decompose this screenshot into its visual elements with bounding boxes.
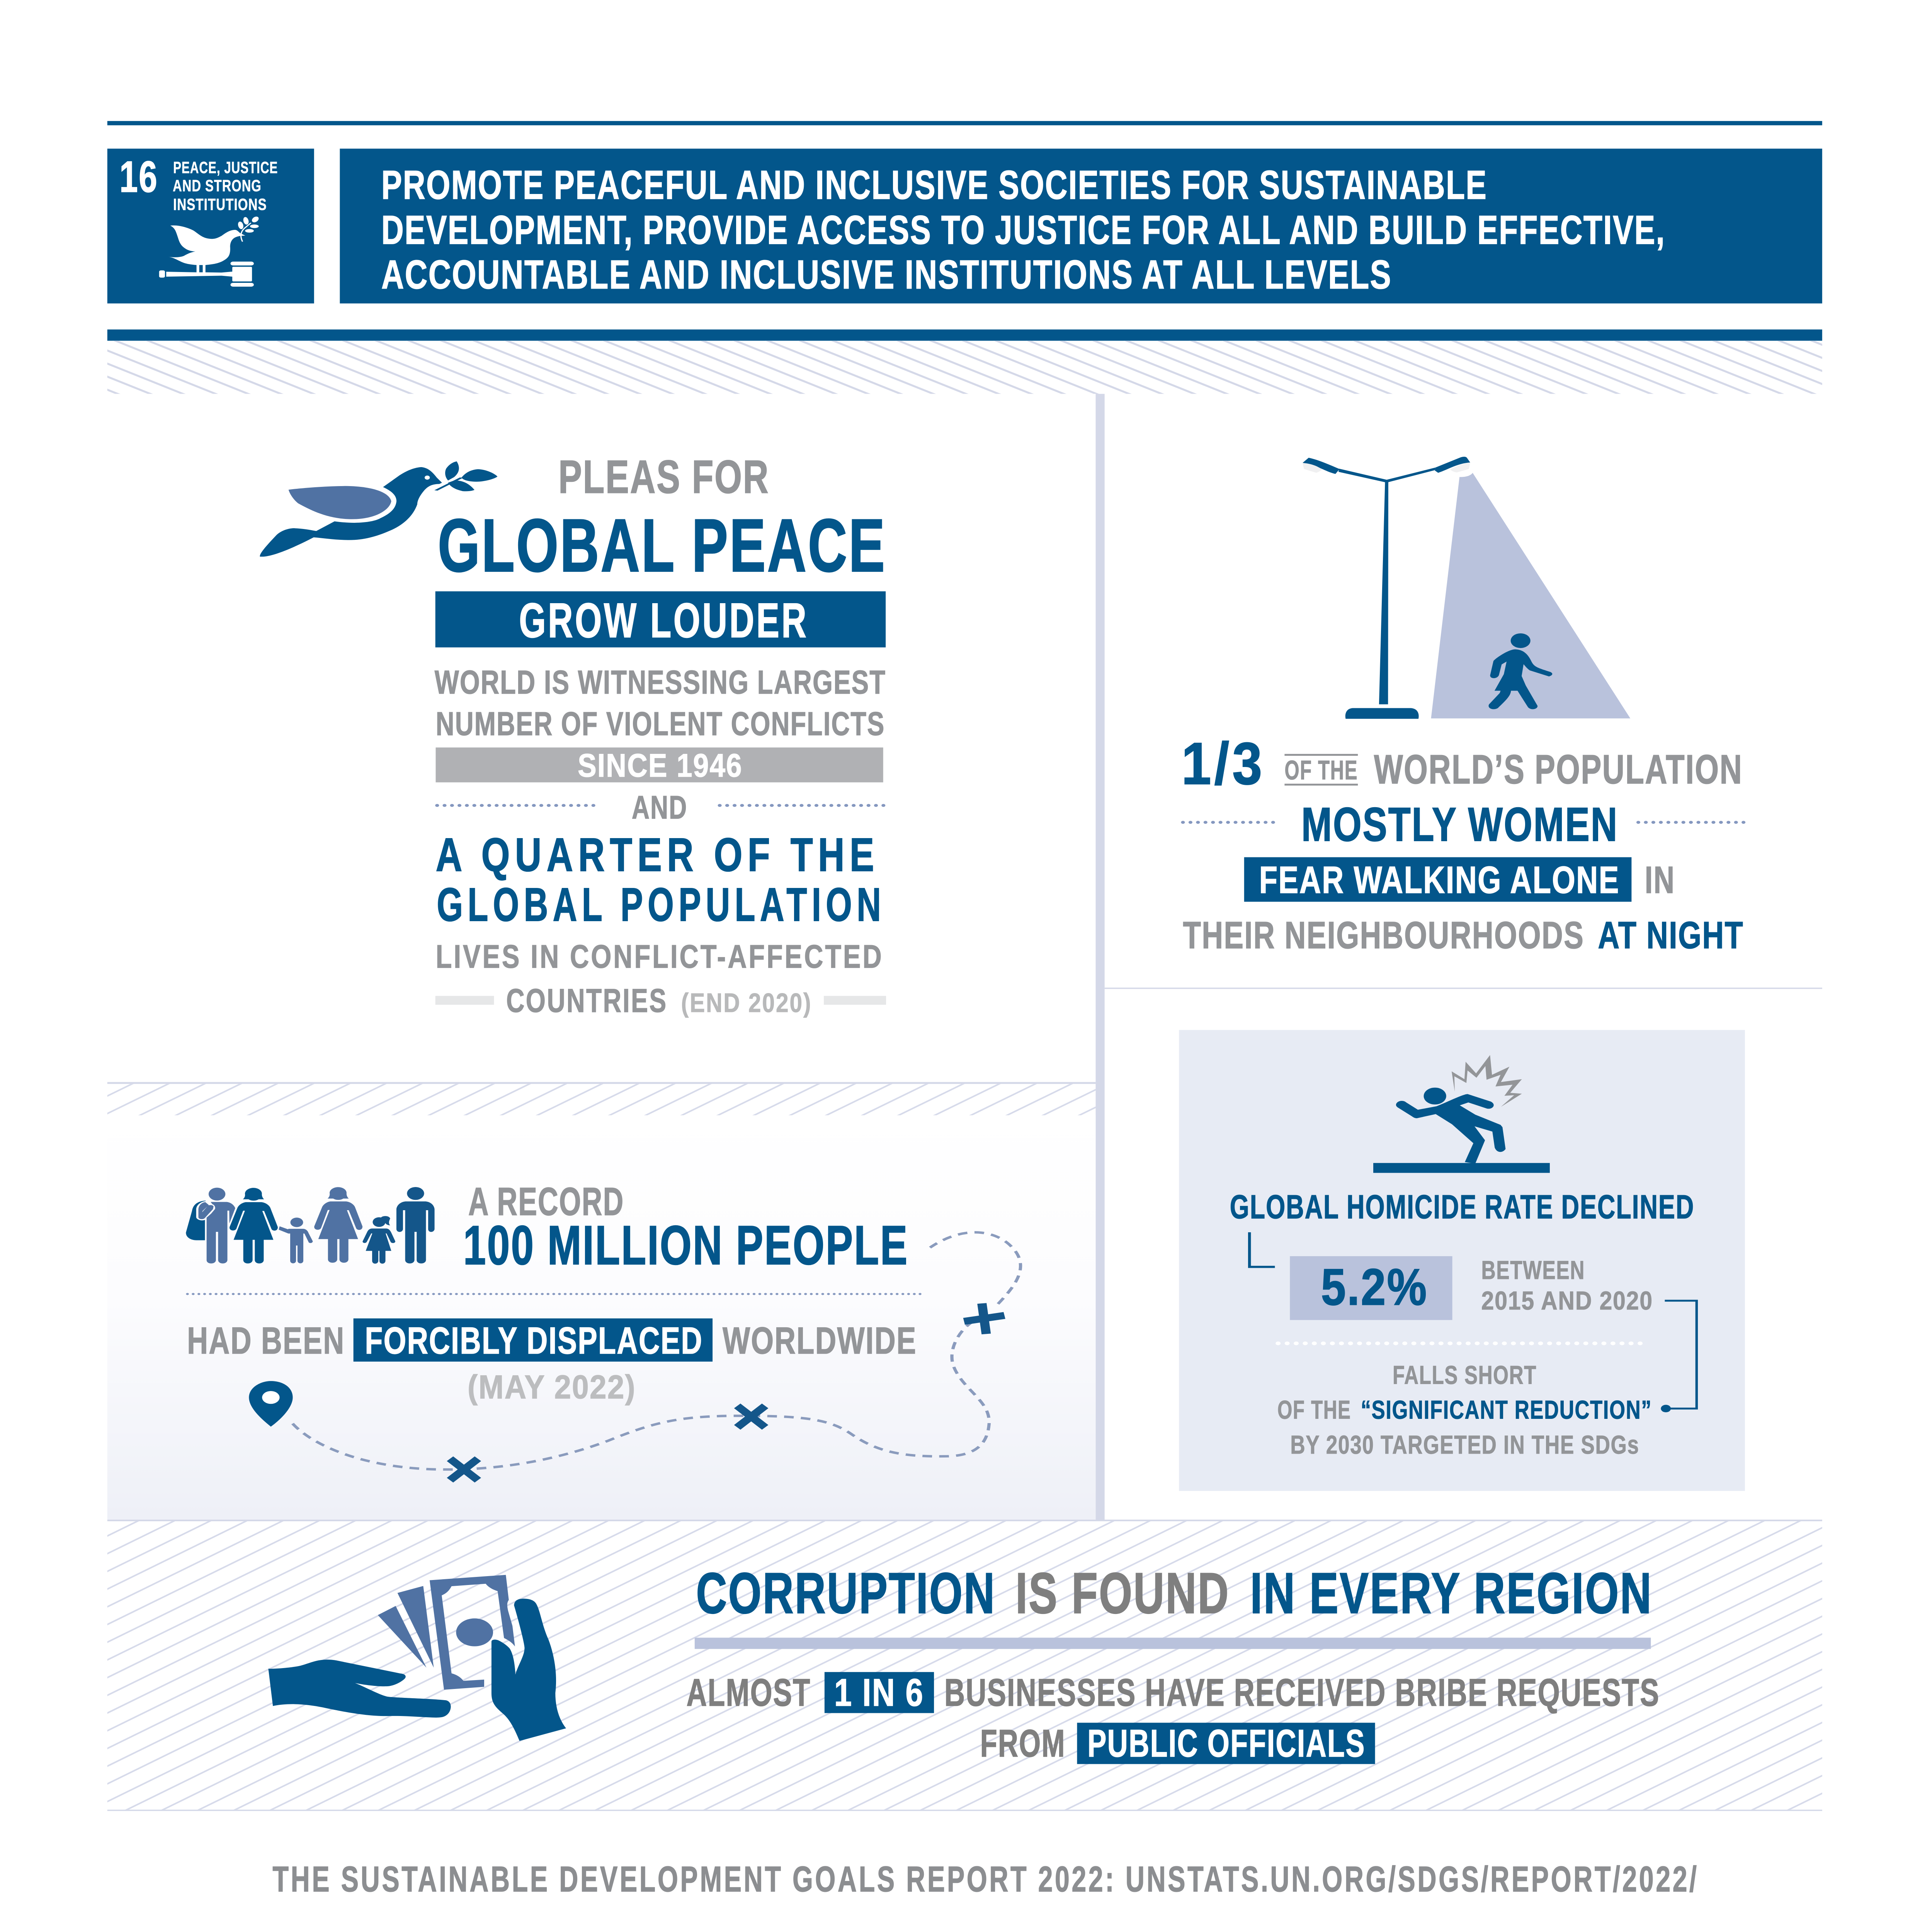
panel: global peace: [260, 451, 886, 1019]
connector line: [1661, 1301, 1697, 1412]
dashed journey path: [293, 1232, 1020, 1469]
text: a record: A RECORD: [468, 1180, 624, 1224]
heading: corruption is found in every region: [696, 1561, 1653, 1625]
statistic: a quarter of the global population: [436, 828, 886, 931]
goal name: PEACE, JUSTICE: [173, 158, 278, 177]
text: falls short of the significant reduction: FALLS SHORT: [1393, 1360, 1537, 1389]
text: largest number of violent conflicts: [435, 664, 886, 742]
text: largest number of violent conflicts: NUMBER OF VIOLENT CONFLICTS: [436, 705, 885, 742]
banner: grow louder: [435, 591, 886, 648]
text: largest number of violent conflicts: WORLD IS WITNESSING LARGEST: [435, 664, 886, 701]
text: falls short of the significant reduction: [1277, 1360, 1652, 1459]
text: at night: AT NIGHT: [1598, 914, 1744, 956]
text: worldwide: WORLDWIDE: [723, 1319, 917, 1362]
text: from public officials: [980, 1722, 1375, 1765]
goal name: [173, 158, 278, 214]
text: between 2015 and 2020: BETWEEN: [1481, 1255, 1585, 1285]
text: of the: OF THE: [1284, 755, 1358, 785]
panel: fear walking alone: [1182, 457, 1747, 956]
icon: plus marker: [964, 1303, 1005, 1334]
icon: x marker: [737, 1406, 765, 1427]
icon: hands passing money: [268, 1575, 566, 1741]
banner: fear walking alone: FEAR WALKING ALONE: [1259, 859, 1620, 901]
SDG 16 goal tile: [107, 149, 314, 303]
banner: forcibly displaced: [354, 1318, 713, 1362]
banner: fear walking alone: [1244, 857, 1631, 902]
goal number: 16: [119, 152, 158, 201]
vertical divider: [1096, 394, 1105, 1521]
panel: corruption: [107, 1520, 1822, 1811]
statistic: a quarter of the global population: GLOBAL POPULATION: [437, 878, 886, 931]
statistic: 100 million people: 100 MILLION PEOPLE: [463, 1214, 908, 1276]
heading: corruption is found in every region: IS FOUND: [1015, 1561, 1230, 1625]
icon: falling figure: [1373, 1055, 1550, 1173]
text: between 2015 and 2020: [1481, 1255, 1653, 1315]
heading: corruption is found in every region: CORRUPTION: [696, 1561, 996, 1625]
text: between 2015 and 2020: 2015 AND 2020: [1481, 1286, 1653, 1315]
icon: family group: [186, 1187, 435, 1264]
banner: since 1946: [436, 747, 883, 784]
text: almost 1 in 6 businesses: [687, 1671, 1660, 1714]
text: almost 1 in 6 businesses: 1 IN 6: [834, 1671, 924, 1714]
icon: x marker: [450, 1459, 478, 1480]
statistic: 5.2 percent: [1290, 1256, 1452, 1320]
text: lives in conflict-affected countries: LIVES IN CONFLICT-AFFECTED: [436, 938, 884, 975]
banner: forcibly displaced: FORCIBLY DISPLACED: [365, 1319, 703, 1362]
text: falls short of the significant reduction: OF THE: [1277, 1395, 1351, 1424]
panel: forcibly displaced: [107, 1082, 1096, 1520]
goal name: AND STRONG: [173, 177, 262, 195]
text: lives in conflict-affected countries: (END 2020): [681, 988, 812, 1018]
heading: global peace: GLOBAL PEACE: [438, 503, 886, 587]
text: mostly women: MOSTLY WOMEN: [1301, 798, 1618, 851]
statistic: 5.2 percent: 5.2%: [1321, 1258, 1428, 1316]
goal name: INSTITUTIONS: [173, 195, 267, 214]
text: lives in conflict-affected countries: COUNTRIES: [506, 982, 667, 1019]
text: from public officials: PUBLIC OFFICIALS: [1087, 1722, 1366, 1765]
heading: pleas for: PLEAS FOR: [558, 451, 769, 503]
icon: dove on gavel: [159, 216, 260, 287]
text: had been: HAD BEEN: [187, 1319, 345, 1362]
text: of the: [1284, 754, 1358, 786]
text: may 2022: (MAY 2022): [468, 1369, 636, 1406]
panel: homicide rate: [1179, 1030, 1745, 1491]
text: from public officials: FROM: [980, 1722, 1066, 1765]
statistic: one third: 1/3: [1182, 730, 1265, 797]
header band with hatching: [107, 330, 1822, 394]
goal statement banner: [340, 149, 1822, 303]
icon: location pin: [249, 1381, 293, 1427]
icon: dove with olive branch: [260, 461, 497, 557]
top rule: [107, 121, 1822, 125]
text: and: AND: [632, 789, 687, 826]
icon: street lamp and walking woman: [1303, 457, 1630, 719]
text: almost 1 in 6 businesses: ALMOST: [687, 1671, 811, 1714]
text: lives in conflict-affected countries: [435, 938, 886, 1019]
banner: since 1946: SINCE 1946: [578, 747, 743, 784]
text: their neighbourhoods: THEIR NEIGHBOURHOODS: [1183, 914, 1584, 956]
banner: grow louder: GROW LOUDER: [519, 593, 808, 648]
text: falls short of the significant reduction: BY 2030 TARGETED IN THE SDGs: [1290, 1430, 1639, 1459]
statistic: a quarter of the global population: A QUARTER OF THE: [436, 828, 879, 881]
text: falls short of the significant reduction: “SIGNIFICANT REDUCTION”: [1361, 1395, 1652, 1424]
text: in: IN: [1645, 859, 1675, 901]
